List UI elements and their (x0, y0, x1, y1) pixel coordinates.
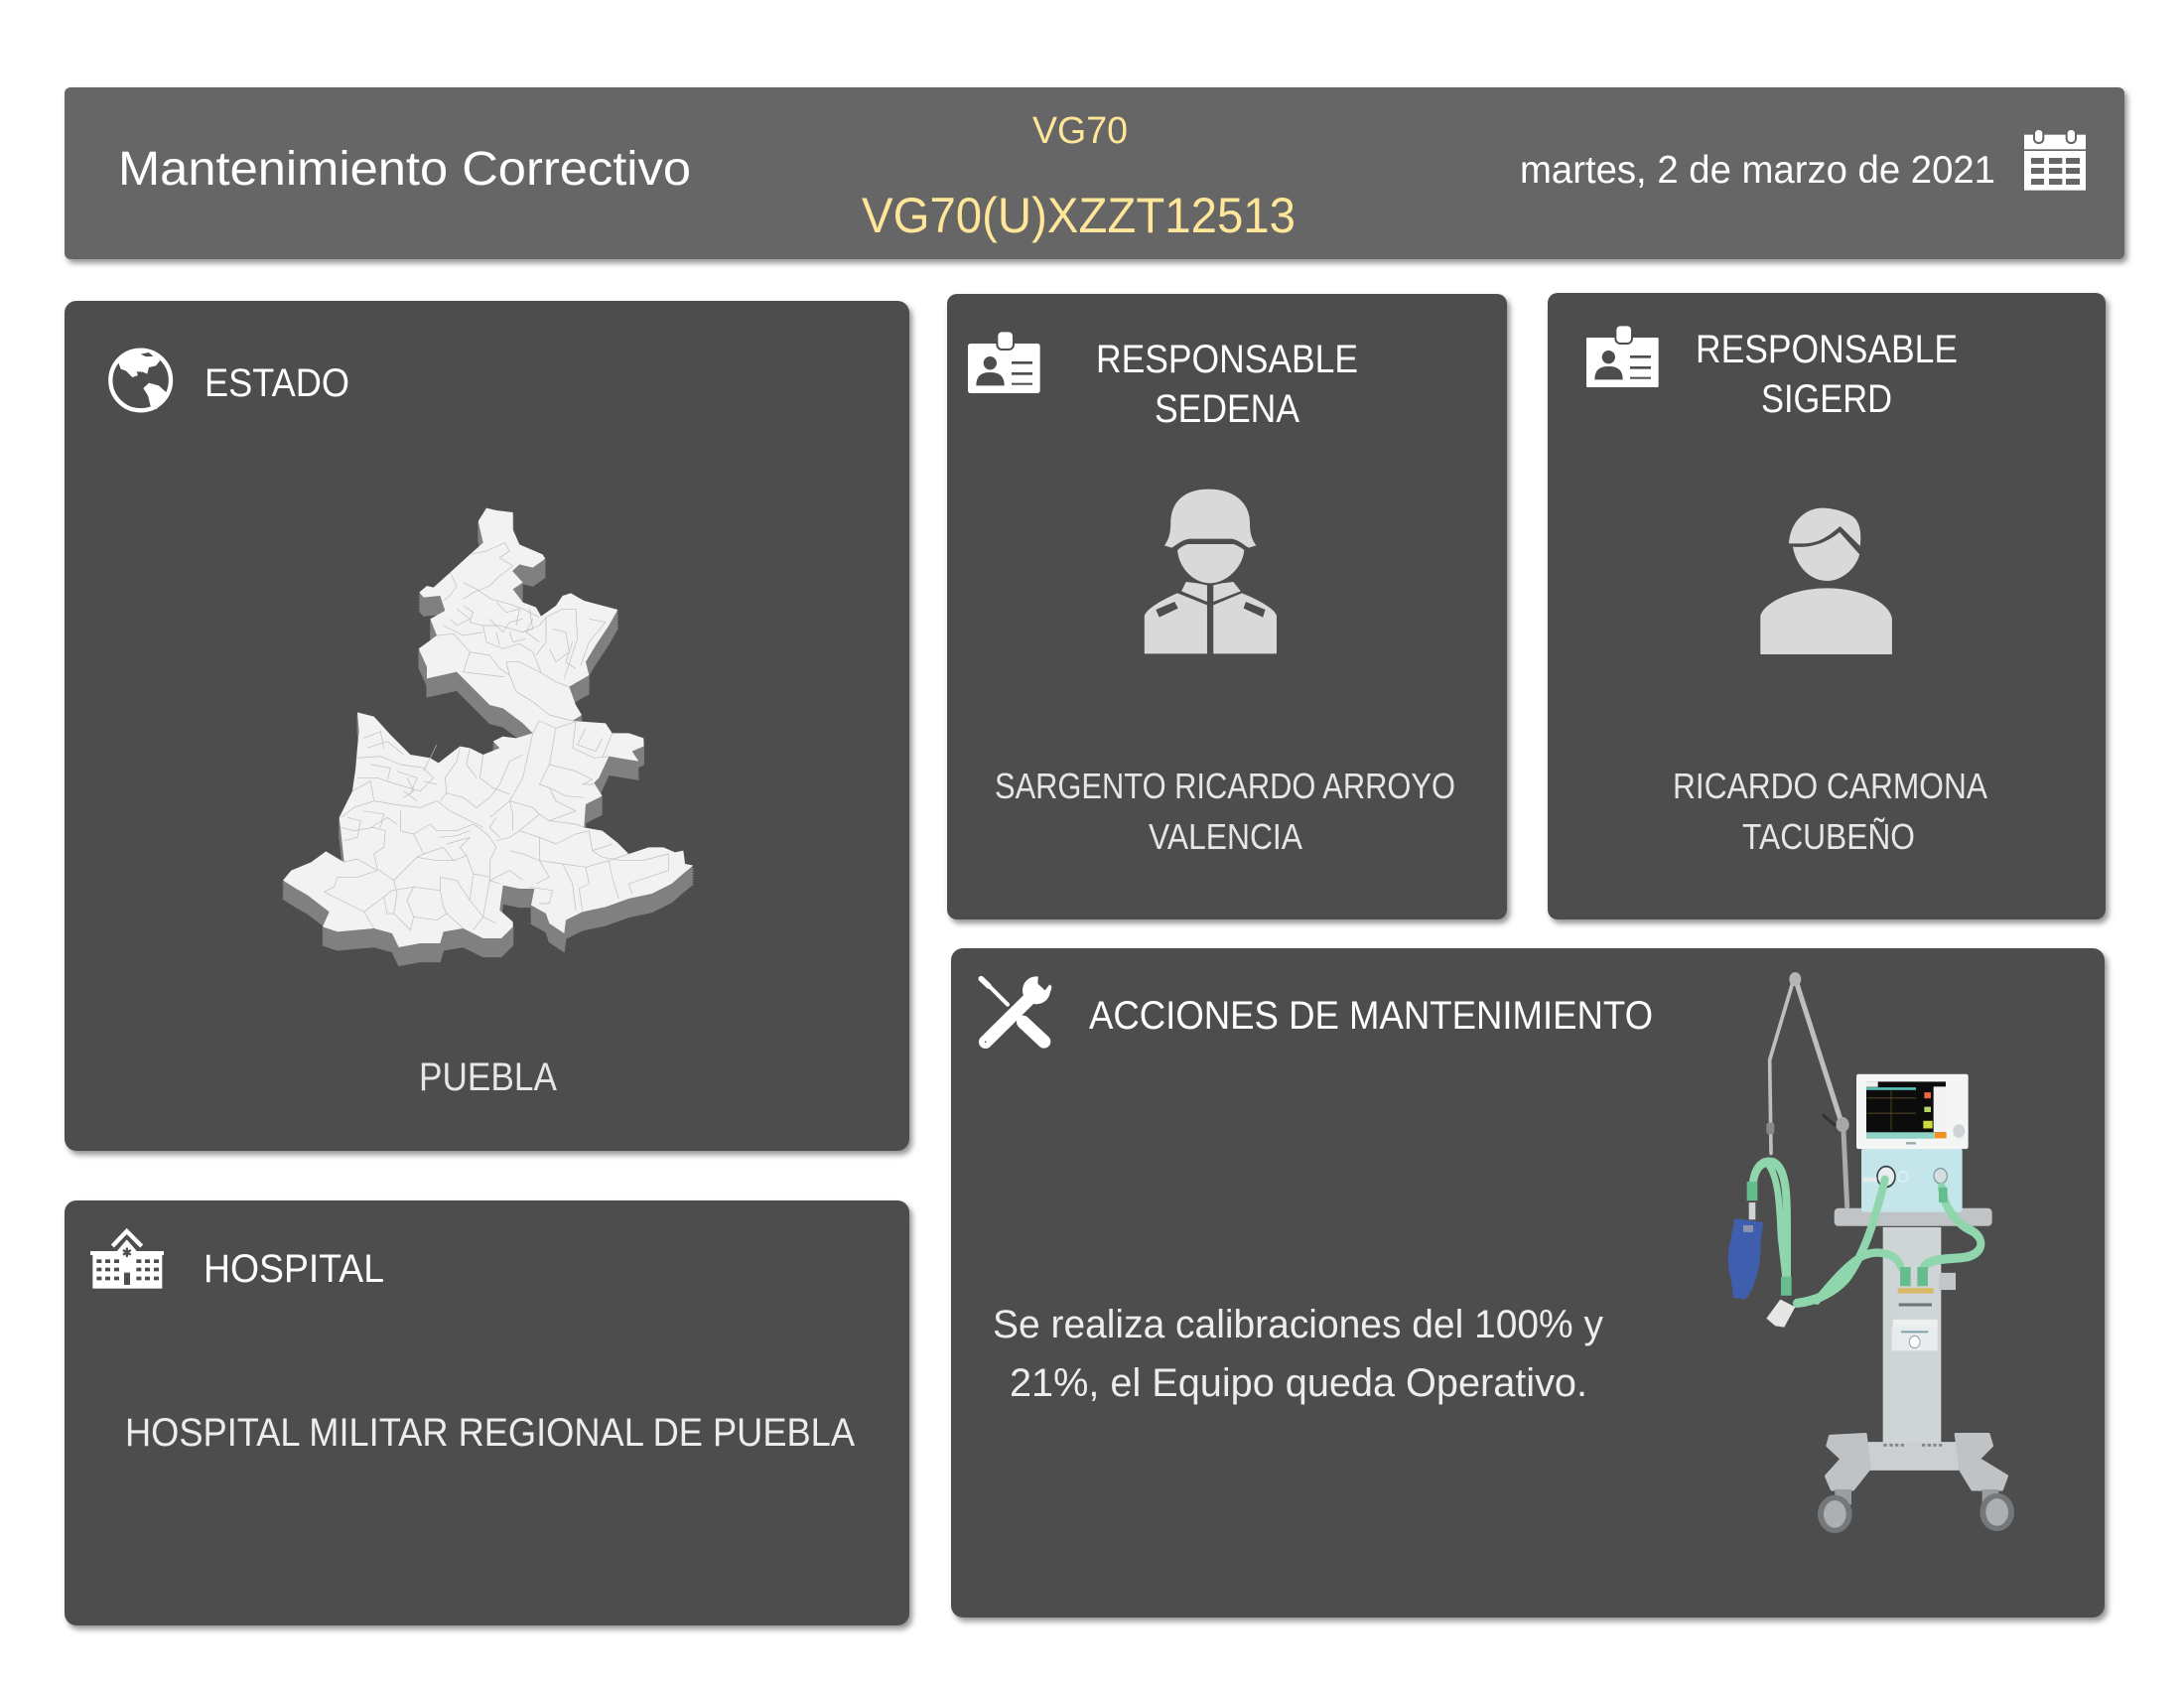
panel: acciones de mantenimiento (951, 948, 2105, 1618)
column and base (1826, 1208, 2007, 1489)
icon: person (1760, 508, 1892, 654)
icon: id badge (1586, 325, 1659, 387)
casters (1818, 1489, 2014, 1533)
monitor (1856, 1074, 1969, 1212)
heading: estado: ESTADO (205, 361, 349, 405)
heading: hospital: HOSPITAL (204, 1247, 384, 1291)
map: Puebla state (283, 508, 693, 966)
maintenance description: Se realiza calibraciones del 100% y (993, 1303, 1603, 1346)
equipment model: VG70 (1032, 110, 1128, 152)
panel: acciones de mantenimiento: 21%, el Equipo queda Operativo. (1010, 1361, 1587, 1405)
panel: estado (65, 301, 909, 1151)
panel: responsable SEDENA (947, 294, 1507, 919)
humidifier (1892, 1288, 1938, 1350)
icon: globe (110, 349, 171, 410)
heading: responsable sedena: RESPONSABLE (1096, 338, 1358, 381)
panel: responsable SEDENA: SEDENA (1155, 387, 1299, 431)
panel: responsable SIGERD: TACUBEÑO (1742, 816, 1915, 857)
y-connector (1766, 1300, 1795, 1328)
breathing circuit tubes (1752, 1162, 1980, 1303)
heading: responsable sigerd: RESPONSABLE (1696, 328, 1958, 371)
icon: calendar (2024, 129, 2086, 191)
panel: responsable SIGERD (1548, 293, 2106, 919)
icon: hospital building (90, 1231, 164, 1289)
ventilator arm (1770, 978, 1847, 1206)
icon: wrench and screwdriver (981, 970, 1055, 1043)
hospital name: HOSPITAL MILITAR REGIONAL DE PUEBLA (125, 1411, 855, 1455)
panel: responsable SEDENA: VALENCIA (1149, 816, 1302, 857)
icon: id badge (968, 331, 1040, 393)
date: martes, 2 de marzo de 2021 (1520, 149, 1995, 192)
state name: PUEBLA (419, 1055, 557, 1099)
image: ventilator (1728, 972, 2014, 1533)
name: sigerd: RICARDO CARMONA (1673, 766, 1987, 806)
heading: acciones de mantenimiento: ACCIONES DE MANTENIMIENTO (1089, 994, 1653, 1038)
panel: responsable SIGERD: SIGERD (1761, 377, 1892, 421)
equipment serial number: VG70(U)XZZT12513 (862, 188, 1296, 243)
breathing bag (1728, 1202, 1763, 1300)
panel: hospital (65, 1200, 909, 1625)
name: sedena: SARGENTO RICARDO ARROYO (995, 766, 1455, 806)
icon: soldier (1145, 490, 1277, 653)
title: Mantenimiento Correctivo (118, 143, 691, 196)
header bar (65, 87, 2124, 259)
